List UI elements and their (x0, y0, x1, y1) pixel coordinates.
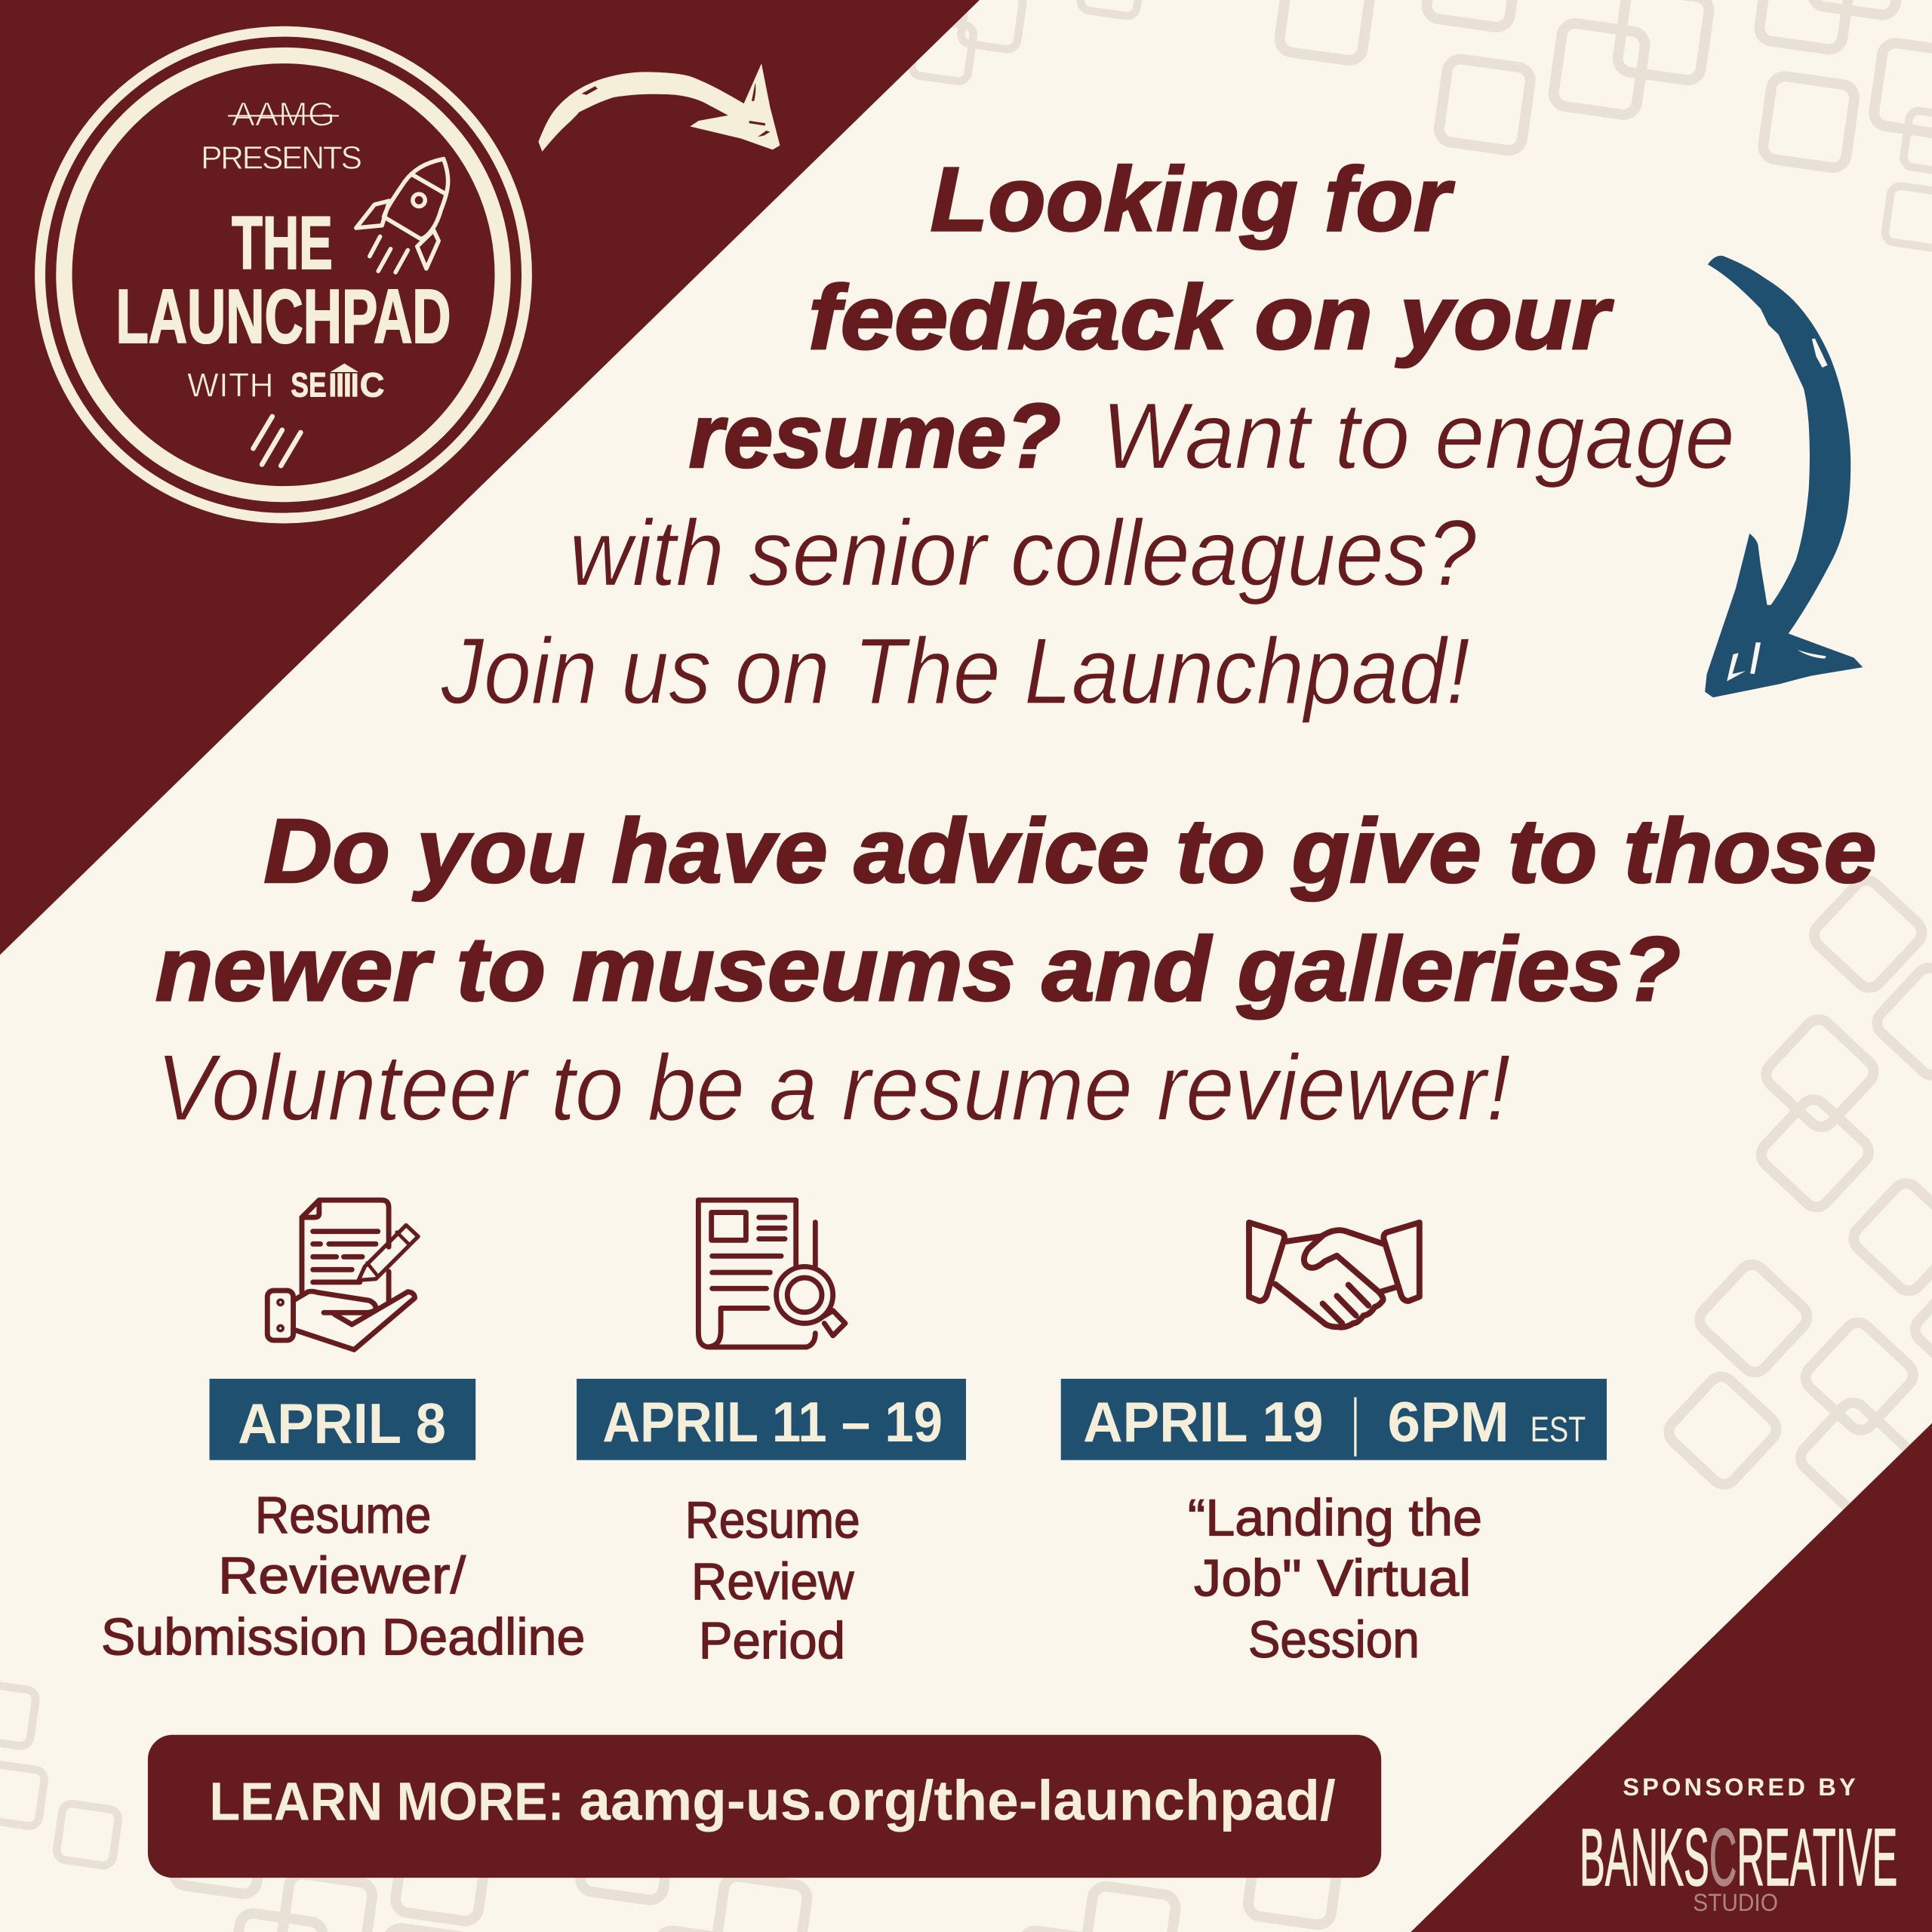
date badge: April 8 (210, 1379, 475, 1460)
arrow: blue curved arrow (1705, 256, 1863, 697)
icon: rocket (356, 159, 448, 272)
caption: resume review period: Review (691, 1552, 854, 1611)
logo text: AAMG: AAMG (232, 97, 335, 134)
logo: SEMC wordmark (291, 364, 384, 405)
caption: resume reviewer/submission deadline: Resume (255, 1486, 431, 1544)
panel: bottom-right maroon triangle (1411, 1423, 1932, 1932)
icon: handshake (1249, 1223, 1420, 1327)
icon: document with magnifier (698, 1200, 845, 1347)
caption: resume review period: Period (699, 1612, 845, 1670)
date badge: April 11-19: APRIL 11 – 19 (602, 1390, 943, 1454)
heading line: newer to museums: newer to museums and galleries? (155, 918, 1681, 1020)
heading line: looking for: Looking for (931, 148, 1455, 250)
button: learn more (148, 1735, 1381, 1878)
icon: logo speed lines (254, 417, 300, 466)
date badge: April 19 6PM EST (1061, 1379, 1607, 1460)
logo: The Launchpad badge (40, 32, 527, 518)
caption: resume reviewer/submission deadline (101, 1486, 586, 1666)
caption: resume reviewer/submission deadline: Reviewer/ (218, 1546, 466, 1604)
icon: hand holding document and pencil (267, 1200, 418, 1349)
caption: landing the job virtual session: “Landing the (1188, 1488, 1482, 1546)
text line: want to engage: Want to engage (1102, 384, 1735, 488)
heading line: feedback on your: feedback on your (808, 266, 1614, 368)
logo: SEMC wordmark: C (360, 366, 384, 405)
caption: landing the job virtual session: Session (1248, 1611, 1420, 1669)
text block: volunteer question (155, 800, 1877, 1140)
caption: resume reviewer/submission deadline: Submission Deadline (101, 1608, 586, 1666)
text line: join us: Join us on The Launchpad! (441, 620, 1470, 724)
date badge: April 19 6PM EST: APRIL 19 (1083, 1390, 1323, 1454)
panel: top-left maroon triangle (0, 0, 980, 955)
sponsor logo subtitle: STUDIO (1693, 1888, 1778, 1916)
caption: landing the job virtual session: Job" Virtual (1194, 1549, 1471, 1607)
text line: volunteer: Volunteer to be a resume reviewer! (156, 1036, 1511, 1140)
text block: resume feedback question (441, 148, 1735, 724)
date badge: April 19 6PM EST: EST (1531, 1410, 1586, 1450)
text line: with senior colleagues: with senior colleagues? (569, 502, 1476, 606)
date badge: April 8: APRIL 8 (238, 1392, 446, 1455)
logo: SEMC wordmark: SE (291, 366, 327, 405)
logo text: launchpad: LAUNCHPAD (115, 274, 451, 359)
logo text: presents: PRESENTS (201, 140, 362, 176)
caption: landing the job virtual session (1188, 1488, 1482, 1669)
heading line: do you have advice: Do you have advice to give to those (263, 800, 1877, 902)
arrow: cream arrow (538, 63, 780, 152)
button: learn more: LEARN MORE: (210, 1771, 565, 1832)
caption: resume review period (685, 1491, 860, 1670)
sponsor block (1580, 1773, 1897, 1916)
sponsor label: SPONSORED BY (1623, 1773, 1856, 1801)
heading line: resume: resume? (689, 385, 1061, 487)
caption: resume review period: Resume (685, 1491, 860, 1549)
button: learn more: aamg-us.org/the-launchpad/ (579, 1768, 1336, 1832)
date badge: April 19 6PM EST: 6PM (1387, 1390, 1509, 1454)
logo text: the: THE (232, 202, 333, 285)
logo text: with: WITH (187, 368, 273, 405)
